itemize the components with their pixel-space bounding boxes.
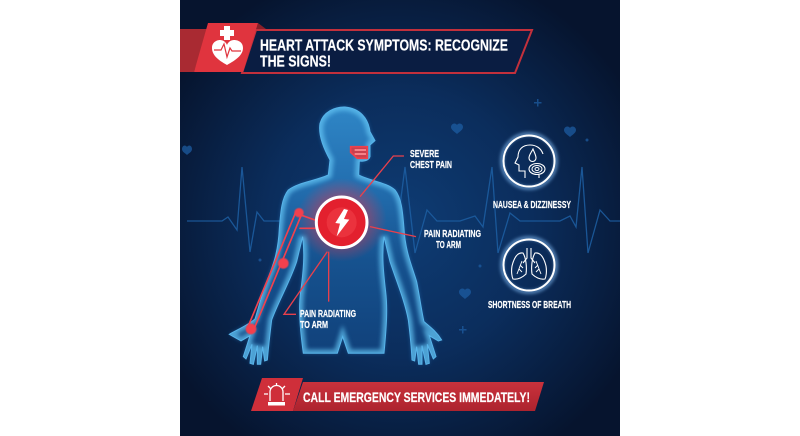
- emergency call banner: [251, 378, 544, 411]
- icon: heart with cross and pulse: [212, 26, 243, 65]
- chest pain callout lines: [284, 156, 416, 314]
- label: severe chest pain: [410, 149, 452, 171]
- body outer glow: [229, 107, 442, 364]
- lightning bolt icon: [335, 209, 349, 236]
- call to action text: CALL EMERGENCY SERVICES IMMEDATELY!: [303, 389, 530, 405]
- human body figure: [229, 107, 442, 364]
- shortness of breath symptom: [488, 238, 571, 311]
- label: pain radiating to arm, right: TO ARM: [436, 240, 461, 251]
- mouth and throat symptom mark: [351, 147, 367, 158]
- icon: head with droplet and spiral: [502, 134, 556, 188]
- label: pain radiating to arm, right: PAIN RADIATING: [424, 229, 481, 240]
- body inner edge light: [229, 107, 442, 364]
- radiating arm pain: [246, 208, 315, 334]
- title banner: [180, 23, 532, 73]
- nausea and dizziness symptom: [493, 134, 571, 211]
- decorative hearts and sparkles: [182, 99, 588, 334]
- label: severe chest pain: SEVERE: [410, 149, 439, 160]
- poster background: [180, 0, 620, 436]
- icon: siren: [264, 383, 290, 406]
- title text: HEART ATTACK SYMPTOMS: RECOGNIZE: [260, 38, 508, 54]
- body outline: [229, 107, 442, 364]
- chest pain badge: [316, 197, 367, 248]
- ribbon fold: [256, 23, 266, 29]
- title text: [260, 38, 508, 70]
- banner bar: [293, 382, 544, 411]
- title panel: [242, 30, 532, 73]
- chest red glow: [297, 178, 387, 262]
- icon: lungs: [502, 238, 556, 292]
- label: pain radiating to arm, lower: PAIN RADIATING: [300, 309, 356, 320]
- label: pain radiating to arm, lower: TO ARM: [300, 320, 328, 331]
- title text: THE SIGNS!: [260, 54, 331, 70]
- label: nausea and dizziness: NAUSEA & DIZZINESSY: [493, 199, 571, 211]
- body silhouette: [229, 107, 442, 364]
- label: shortness of breath: SHORTNESS OF BREATH: [488, 299, 571, 311]
- left ribbon strip: [180, 29, 208, 72]
- label: severe chest pain: CHEST PAIN: [410, 160, 452, 171]
- label: pain radiating to arm, lower: [300, 309, 356, 331]
- red icon tab: [194, 23, 258, 72]
- red tab: [251, 378, 303, 411]
- ECG line background: [187, 167, 620, 253]
- label: pain radiating to arm, right: [424, 229, 481, 251]
